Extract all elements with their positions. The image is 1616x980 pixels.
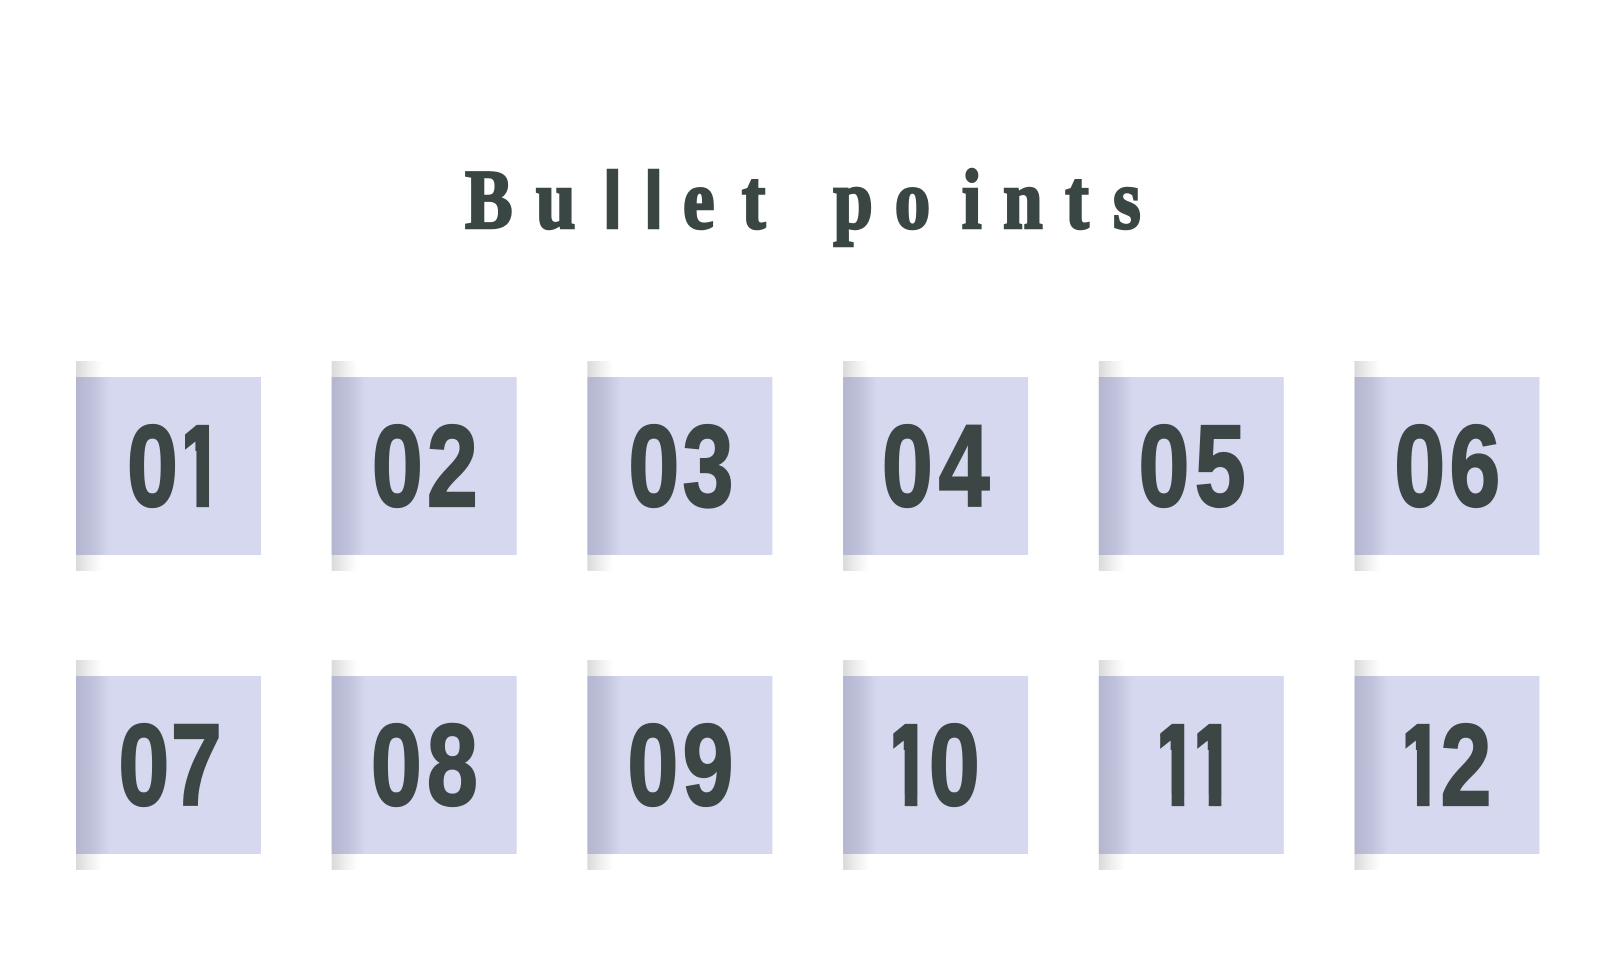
number 06: 0 (1394, 402, 1445, 532)
number 02: 0 (372, 402, 423, 532)
number 07: 0 (118, 701, 169, 831)
card 12 (1354, 660, 1540, 870)
number 10: 1 (883, 701, 934, 831)
number 03: 0 (628, 402, 679, 532)
number 04: 4 (939, 402, 990, 532)
number 04 (882, 402, 990, 532)
number 05: 0 (1139, 402, 1189, 532)
number 08: 8 (427, 701, 478, 831)
card 01 (76, 361, 261, 571)
card 03 (587, 361, 772, 571)
number 12: 1 (1395, 701, 1446, 831)
title: Bu llet points (465, 152, 1141, 246)
card 07 (76, 660, 261, 870)
number 07 (118, 701, 222, 831)
number 01: 1 (175, 402, 226, 532)
number 10: 0 (929, 701, 980, 831)
card 06 (1354, 361, 1540, 571)
card 11 (1099, 660, 1284, 870)
number 06: 6 (1449, 402, 1500, 532)
number 08 (371, 701, 478, 831)
number 03 (628, 402, 733, 532)
number 03: 3 (683, 402, 733, 532)
card 05 (1099, 361, 1284, 571)
number 12: 2 (1441, 701, 1491, 831)
number 01 (130, 424, 210, 508)
number 11: 1 (1187, 701, 1238, 831)
number 01: 0 (127, 402, 178, 532)
number 10 (893, 722, 977, 808)
number 04: 0 (882, 402, 933, 532)
number 07: 7 (171, 701, 222, 831)
card 04 (843, 361, 1028, 571)
card 09 (587, 660, 772, 870)
number 11 (1160, 724, 1222, 806)
number 05 (1139, 402, 1246, 532)
card 02 (332, 361, 517, 571)
card 10 (843, 660, 1028, 870)
number 08: 0 (371, 701, 422, 831)
number 12 (1406, 722, 1489, 806)
number 09: 9 (683, 701, 733, 831)
number 09 (627, 701, 733, 831)
number 02: 2 (427, 402, 478, 532)
number 11: 1 (1150, 701, 1201, 831)
card 08 (332, 660, 517, 870)
number 06 (1394, 402, 1500, 532)
number 05: 5 (1195, 402, 1246, 532)
number 09: 0 (627, 701, 678, 831)
number 02 (372, 402, 478, 532)
